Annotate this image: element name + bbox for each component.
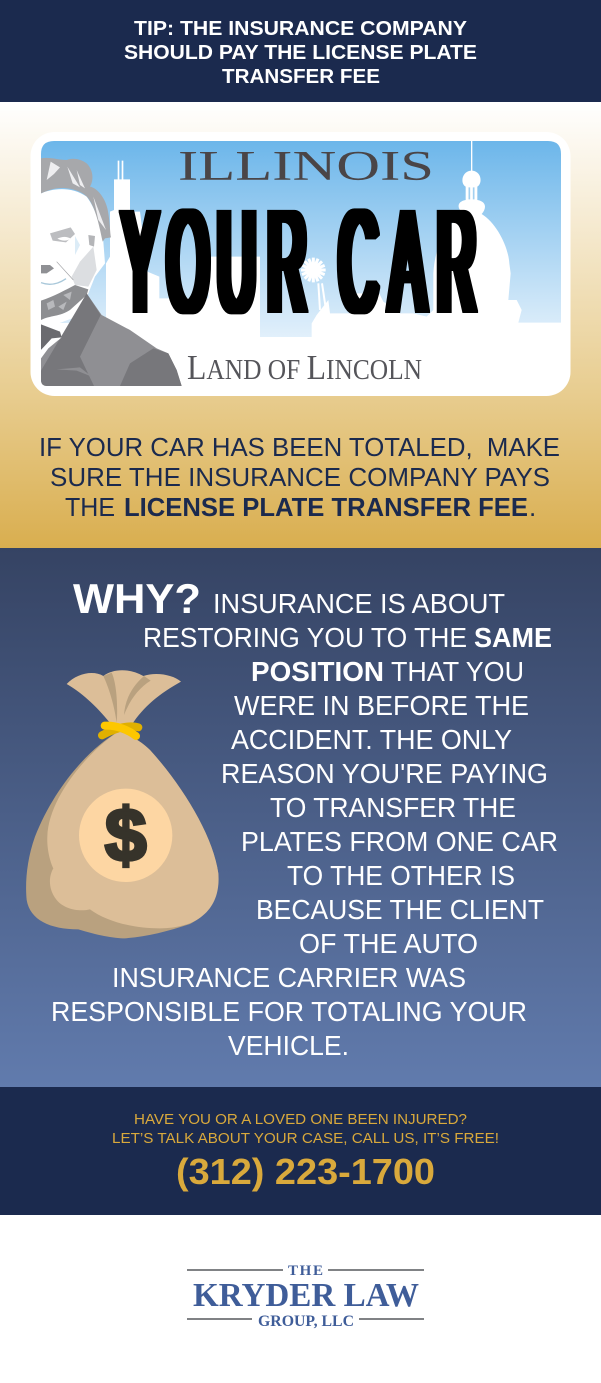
text block: why explanation: THAT YOU (391, 656, 524, 687)
logo: the kryder law group: GROUP, LLC (258, 1313, 354, 1330)
plate state name: ILLINOIS (178, 144, 434, 190)
title: TRANSFER FEE (222, 65, 380, 88)
text block: license plate advice: IF YOUR CAR HAS BEEN TOTALED, MAKE (39, 432, 560, 462)
text block: why explanation: POSITION (251, 656, 384, 687)
plate text: your car: YOUR CAR (122, 180, 476, 344)
text block: why explanation: TO THE OTHER IS (287, 860, 515, 891)
text block: why explanation: OF THE AUTO (299, 928, 478, 959)
text block: why explanation: WERE IN BEFORE THE (234, 690, 529, 721)
text block: license plate advice: SURE THE INSURANCE COMPANY PAYS (50, 462, 550, 492)
plate slogan: LAND OF LINCOLN (187, 348, 422, 387)
text block: why explanation: RESPONSIBLE FOR TOTALING YOUR (51, 996, 527, 1027)
text block: why explanation: RESTORING YOU TO THE (143, 622, 467, 653)
icon: windmill (301, 258, 326, 310)
text block: license plate advice: LICENSE PLATE TRANSFER FEE (124, 492, 528, 522)
text block: license plate advice: THE (65, 492, 115, 522)
logo: the kryder law group (187, 1263, 424, 1330)
dollar sign: $ (105, 793, 147, 877)
text block: why explanation: VEHICLE. (228, 1030, 349, 1061)
text block: call prompt: LET’S TALK ABOUT YOUR CASE, CALL US, IT’S FREE! (112, 1130, 499, 1147)
text block: call prompt: HAVE YOU OR A LOVED ONE BEEN INJURED? (134, 1111, 467, 1128)
text block: why explanation: INSURANCE IS ABOUT (213, 588, 505, 619)
panel: why explanation (0, 548, 601, 1087)
plate illustration (41, 141, 561, 386)
phone number: (312) 223-1700 (176, 1151, 435, 1192)
logo: the kryder law group: KRYDER LAW (193, 1277, 419, 1314)
text block: why explanation: REASON YOU'RE PAYING (221, 758, 548, 789)
text block: call prompt (112, 1111, 499, 1147)
text block: why explanation: PLATES FROM ONE CAR (241, 826, 558, 857)
logo: the kryder law group: THE (288, 1263, 323, 1279)
title (124, 17, 477, 88)
heading: why: WHY? (73, 575, 201, 622)
panel: header banner (0, 0, 601, 102)
title: SHOULD PAY THE LICENSE PLATE (124, 41, 477, 64)
title: TIP: THE INSURANCE COMPANY (134, 17, 467, 40)
license plate (30, 132, 570, 396)
panel: license plate section (0, 102, 601, 548)
icon: lincoln portrait (41, 158, 182, 386)
text block: license plate advice (39, 432, 560, 522)
text block: why explanation: SAME (474, 622, 552, 653)
text block: why explanation: TO TRANSFER THE (270, 792, 516, 823)
text block: why explanation: ACCIDENT. THE ONLY (231, 724, 512, 755)
icon: money bag (26, 670, 219, 938)
text block: why explanation (51, 588, 558, 1061)
panel: call to action (0, 1087, 601, 1215)
text block: license plate advice: . (529, 492, 536, 522)
text block: why explanation: INSURANCE CARRIER WAS (112, 962, 466, 993)
text block: why explanation: BECAUSE THE CLIENT (256, 894, 544, 925)
